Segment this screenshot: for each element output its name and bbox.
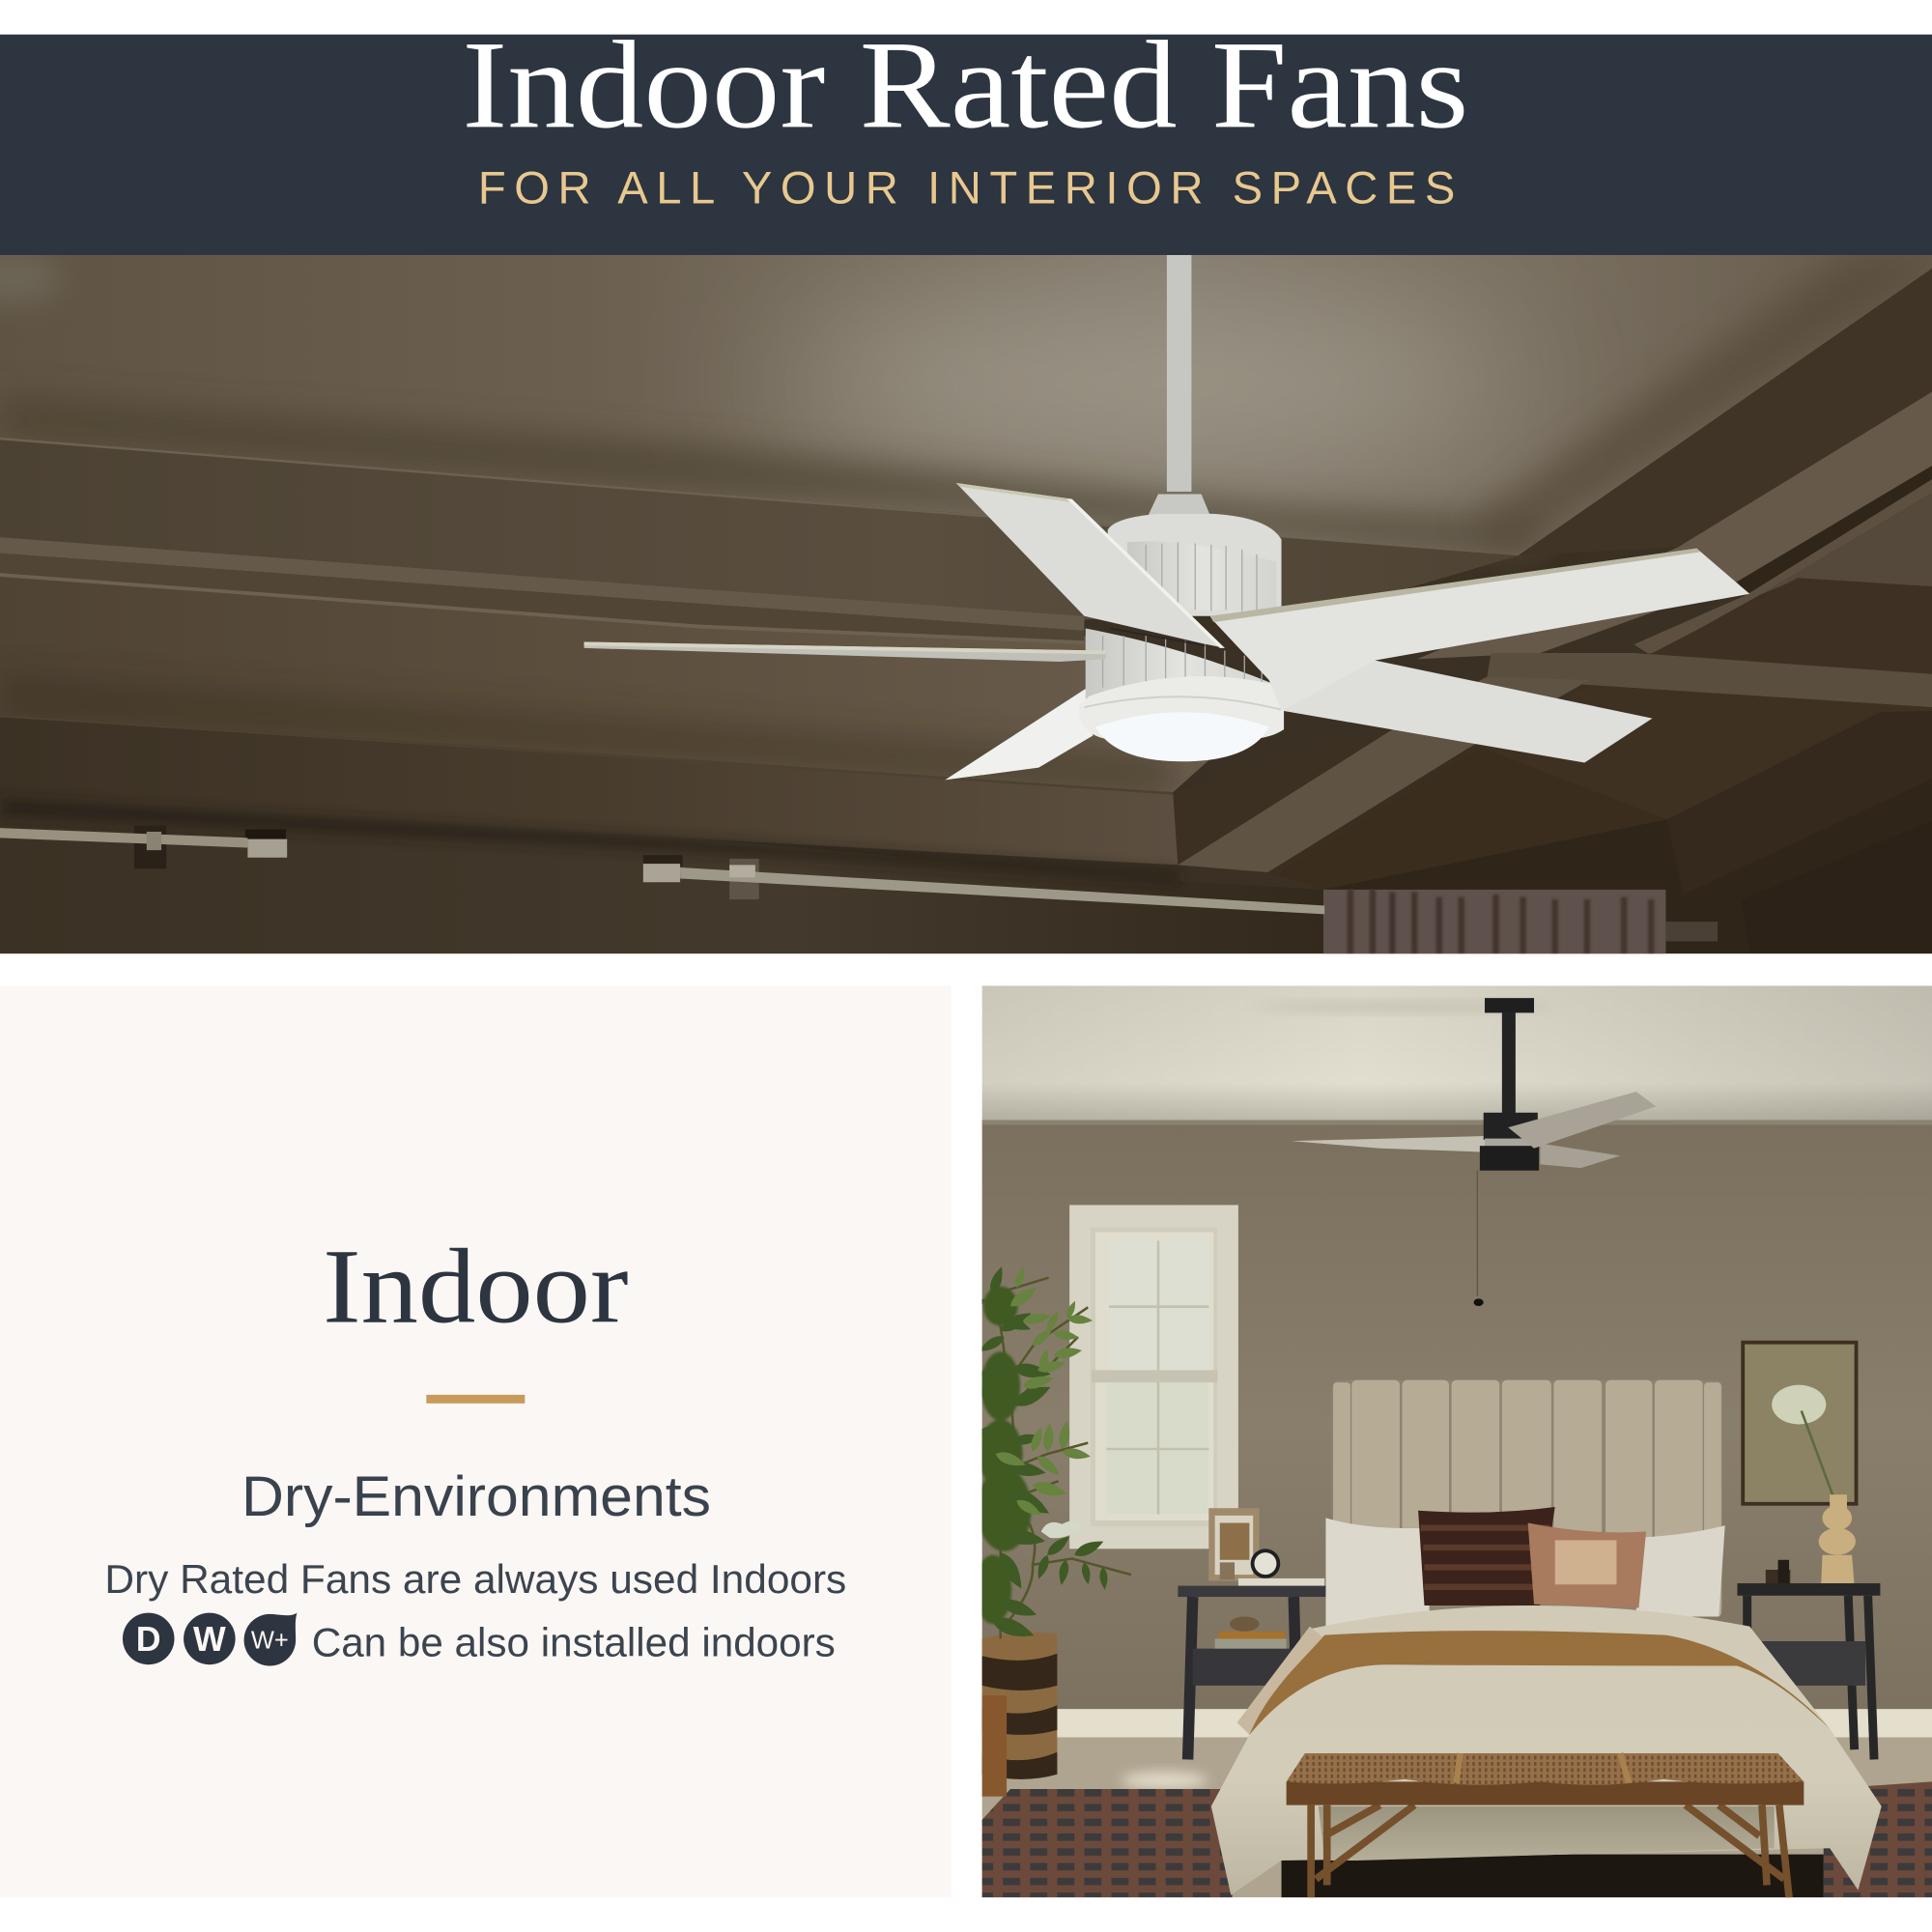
ceiling fan	[1292, 998, 1656, 1306]
throw blanket	[1249, 1631, 1830, 1735]
art frame	[1741, 1341, 1858, 1506]
plant	[963, 1264, 1131, 1643]
canopy	[1149, 494, 1210, 515]
rugs	[982, 1781, 1932, 1897]
blade: right upper	[1212, 549, 1749, 711]
room shell	[982, 985, 1932, 1897]
body line two: Can be also installed indoors	[312, 1619, 836, 1664]
photo: ceiling with white fan	[0, 252, 1932, 953]
body line one: Dry Rated Fans are always used Indoors	[104, 1556, 846, 1602]
subheading: Dry-Environments	[242, 1465, 711, 1528]
rating icon: W+	[244, 1613, 297, 1665]
ceiling planes	[0, 252, 1932, 953]
panel: indoor text	[0, 985, 952, 1897]
blade: top left	[956, 483, 1225, 648]
bench	[1287, 1753, 1804, 1897]
window	[1069, 1205, 1238, 1548]
right beams	[1178, 269, 1932, 953]
blade: left edge-on	[584, 642, 1106, 662]
rating icon: D	[123, 1613, 174, 1664]
bed	[1211, 1605, 1882, 1897]
right nightstand and vase	[1737, 1494, 1880, 1759]
upper housing	[1108, 514, 1282, 616]
rating icon: D: D	[136, 1620, 161, 1659]
rating icon: W: W	[193, 1620, 226, 1659]
lower housing	[1086, 629, 1276, 702]
rating icon: W+: W+	[251, 1628, 289, 1655]
baskets	[982, 1633, 1057, 1797]
light ring	[1079, 676, 1284, 739]
accent rule	[426, 1395, 525, 1404]
curtain	[1323, 890, 1718, 953]
curtain rods	[0, 826, 1324, 914]
light diffuser	[1095, 712, 1269, 761]
photo: bedroom	[963, 985, 1932, 1897]
rating icon: W	[184, 1613, 236, 1664]
blade: lower right	[1269, 661, 1652, 763]
header banner	[0, 15, 1932, 255]
title: Indoor Rated Fans	[462, 15, 1468, 155]
heading: Indoor: Indoor	[323, 1228, 629, 1346]
left nightstand	[1178, 1508, 1328, 1759]
pillows	[1325, 1507, 1725, 1633]
fan	[584, 255, 1749, 780]
downrod	[1167, 255, 1191, 492]
blade: lower left	[945, 689, 1093, 780]
subtitle: FOR ALL YOUR INTERIOR SPACES	[478, 162, 1455, 213]
headboard	[1332, 1380, 1722, 1616]
